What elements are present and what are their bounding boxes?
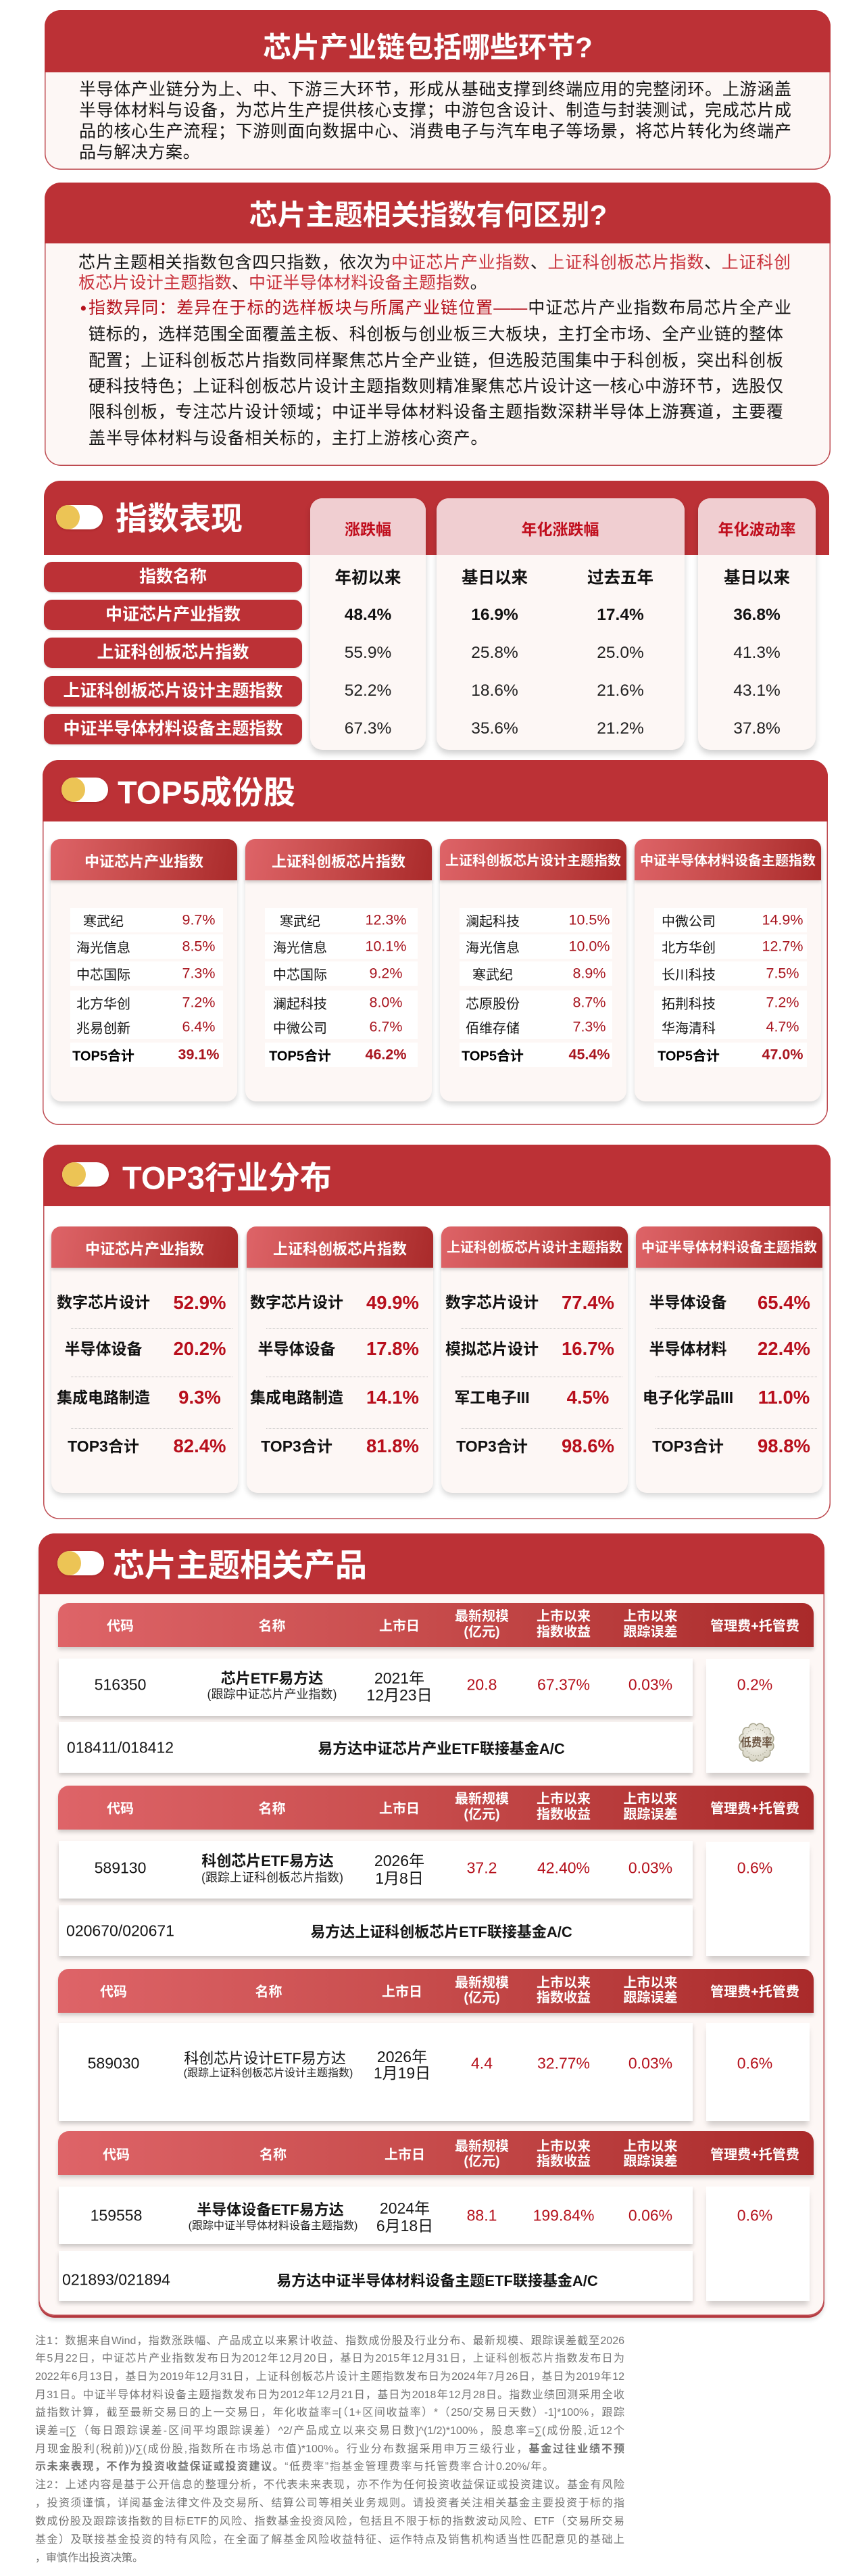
column: annualized change: 25.0% <box>597 644 644 662</box>
card: CSI semiconductor materials equipment top 5: 华海清科 <box>662 1021 716 1036</box>
card: CSI chip industry top 3: 集成电路制造 <box>57 1389 150 1406</box>
card: CSI semiconductor materials equipment top 5: 中证半导体材料设备主题指数 <box>640 853 816 868</box>
card: CSI chip industry top 5: 6.4% <box>182 1018 216 1034</box>
card: SSE STAR chip top 3: TOP3合计 <box>261 1437 332 1455</box>
card: SSE STAR chip design top 3: 数字芯片设计 <box>445 1293 539 1311</box>
card: SSE STAR chip design top 3: 模拟芯片设计 <box>445 1340 539 1358</box>
card: SSE STAR chip design top 5: 寒武纪 <box>472 968 513 983</box>
table header: 上市日 <box>379 1801 420 1816</box>
card: CSI semiconductor materials equipment top 5: 中微公司 <box>662 914 716 929</box>
footnotes <box>35 2335 624 2564</box>
column: change <box>310 498 426 750</box>
heading text: TOP5成份股 <box>118 775 295 810</box>
table header <box>58 1969 814 2013</box>
footnotes: 2022年6月13日，基日为2019年12月31日，上证科创板芯片设计主题指数发布日为2024年7月26日，基日为2019年12 <box>35 2371 624 2383</box>
card: CSI semiconductor materials equipment top 3: 11.0% <box>758 1387 810 1408</box>
card: SSE STAR chip design top 3: 77.4% <box>562 1292 614 1313</box>
table header: 上市以来 <box>623 2139 677 2154</box>
product block: 159558: (跟踪中证半导体材料设备主题指数) <box>189 2220 357 2232</box>
product block: 589130 <box>57 1786 815 1962</box>
table header: 代码 <box>107 1801 134 1816</box>
column: change: 52.2% <box>345 682 391 700</box>
icon: toggle <box>61 778 108 802</box>
product block: 589130: 易方达上证科创板芯片ETF联接基金A/C <box>310 1924 572 1940</box>
panel: related products <box>39 1533 824 2316</box>
card: CSI chip industry top 5: 7.2% <box>182 994 216 1010</box>
table header: 最新规模 <box>455 2139 509 2154</box>
footnotes: 月现金股利(税前))/∑(成份股,指数所在市场总市值)*100%。行业分布数据采用申万三级行业，基金过往业绩不预 <box>35 2443 624 2455</box>
heading band: products <box>39 1533 824 1594</box>
panel: index differences <box>45 183 831 466</box>
card: SSE STAR chip design top 5: 澜起科技 <box>466 914 520 929</box>
panel: top 3 industries <box>43 1145 831 1519</box>
card: SSE STAR chip top 5: 上证科创板芯片指数 <box>272 853 405 870</box>
product block: 159558 <box>57 2131 815 2307</box>
table header: 指数收益 <box>537 2154 591 2169</box>
table header: (亿元) <box>464 1990 500 2005</box>
column: annualized change: 25.8% <box>471 644 518 662</box>
column: annualized change: 35.6% <box>471 719 518 738</box>
card: CSI semiconductor materials equipment top 5: 47.0% <box>762 1047 803 1063</box>
row labels: index names: 上证科创板芯片设计主题指数 <box>63 682 282 700</box>
table header: 指数收益 <box>537 1807 591 1822</box>
product block: 589130: 589130 <box>95 1859 146 1877</box>
product block: 589030: 0.03% <box>628 2054 672 2072</box>
product block: 589030: 2026年 <box>377 2048 427 2066</box>
column: annualized change: 18.6% <box>471 682 518 700</box>
card: CSI chip industry top 5: TOP5合计 <box>72 1049 134 1064</box>
card: SSE STAR chip top 3 <box>247 1226 433 1493</box>
card: SSE STAR chip design top 5: 10.5% <box>569 911 610 928</box>
column: annualized volatility: 37.8% <box>733 719 781 738</box>
card: CSI semiconductor materials equipment top 5: TOP5合计 <box>658 1049 720 1064</box>
card: SSE STAR chip design top 5: 45.4% <box>569 1047 610 1063</box>
product block: 589030: 32.77% <box>537 2054 590 2072</box>
icon: low fee badge: 低费率 <box>741 1736 772 1749</box>
card: SSE STAR chip top 3: 14.1% <box>366 1387 419 1408</box>
footnotes: 注2：上述内容是基于公开信息的整理分析，不代表未来表现，亦不作为任何投资收益保证或投资建议。基金有风险 <box>35 2479 624 2491</box>
column: change: 48.4% <box>345 606 391 624</box>
text block: index list: 板芯片设计主题指数、中证半导体材料设备主题指数。 <box>78 273 487 292</box>
text block: industry chain description <box>79 80 791 162</box>
table header: 管理费+托管费 <box>710 2147 799 2162</box>
card: SSE STAR chip design top 5: 7.3% <box>572 1018 606 1034</box>
card: SSE STAR chip top 5 <box>245 839 432 1101</box>
product block: 589130: 1月8日 <box>375 1869 424 1887</box>
card: CSI chip industry top 5: 中证芯片产业指数 <box>84 853 203 870</box>
product block: 159558: 2024年 <box>380 2199 430 2217</box>
product block: 589030: 0.6% <box>737 2054 772 2072</box>
text block: index list: 芯片主题相关指数包含四只指数，依次为中证芯片产业指数、上证科创板芯片指数、上证科创 <box>78 253 791 272</box>
card: SSE STAR chip design top 3: TOP3合计 <box>456 1437 528 1455</box>
text block: index list <box>78 253 791 292</box>
footnotes: 益指数计算，截至最新交易日的上一交易日，年化收益率=[（1+区间收益率）*（250/交易日天数）-1]*100%，跟踪 <box>35 2407 624 2418</box>
card: CSI semiconductor materials equipment top 3: TOP3合计 <box>652 1437 724 1455</box>
heading: index differences <box>45 183 831 243</box>
card: CSI chip industry top 5: 8.5% <box>182 938 216 955</box>
product block: 589130: 2026年 <box>374 1852 424 1869</box>
panel: top 5 constituents <box>43 760 828 1125</box>
card: CSI semiconductor materials equipment top 3: 半导体设备 <box>649 1293 727 1311</box>
card: CSI chip industry top 5: 海光信息 <box>76 941 130 956</box>
column: annualized change: 过去五年 <box>587 569 653 587</box>
product block: 516350: 67.37% <box>537 1675 590 1693</box>
card: CSI semiconductor materials equipment top 3: 98.8% <box>758 1435 810 1456</box>
table header: 跟踪误差 <box>623 1807 677 1822</box>
card: SSE STAR chip design top 5: 8.7% <box>572 994 606 1010</box>
card: SSE STAR chip design top 3: 军工电子III <box>454 1389 530 1406</box>
product block: 159558: 199.84% <box>533 2207 594 2224</box>
product block: 516350: 2021年 <box>374 1669 424 1687</box>
card: SSE STAR chip design top 3 <box>441 1226 628 1493</box>
card: SSE STAR chip top 5: 12.3% <box>366 911 406 928</box>
table header: 名称 <box>258 1619 285 1633</box>
row labels: index names: 中证半导体材料设备主题指数 <box>63 719 282 738</box>
card: SSE STAR chip top 3: 数字芯片设计 <box>250 1293 343 1311</box>
product block: 516350: 芯片ETF易方达 <box>221 1670 323 1687</box>
footnotes: 误差=[∑（每日跟踪误差-区间平均跟踪误差）^2/产品成立以来交易日数]^(1/2)*100%，股息率=∑(成份股,近12个 <box>35 2425 624 2437</box>
footnotes: 年5月22日，中证芯片产业指数发布日为2012年12月20日，基日为2015年12月31日，上证科创板芯片指数发布日为 <box>35 2353 624 2364</box>
table header: 跟踪误差 <box>623 2154 677 2169</box>
text block: industry chain description: 半导体材料与设备，为芯片生产提供核心支撑；中游包含设计、制造与封装测试，完成芯片成 <box>79 101 791 120</box>
card: CSI semiconductor materials equipment top 5: 7.2% <box>766 994 799 1010</box>
product block: 159558: 021893/021894 <box>62 2270 170 2288</box>
column: annualized change: 21.2% <box>597 719 644 738</box>
icon: toggle <box>57 1551 104 1575</box>
column: annualized volatility: 41.3% <box>733 644 781 662</box>
table header: 名称 <box>255 1985 282 2000</box>
card: CSI semiconductor materials equipment top 5: 4.7% <box>766 1018 799 1034</box>
table header: 上市日 <box>385 2147 425 2162</box>
card: SSE STAR chip design top 3: 16.7% <box>562 1338 614 1359</box>
column: annualized volatility <box>698 498 816 750</box>
card: SSE STAR chip design top 5: 海光信息 <box>466 941 520 956</box>
text block: industry chain description: 品与解决方案。 <box>79 143 200 162</box>
product block: 589030: 1月19日 <box>374 2064 430 2082</box>
table header: 管理费+托管费 <box>710 1619 799 1633</box>
card: SSE STAR chip top 5: 10.1% <box>366 938 406 955</box>
card: CSI semiconductor materials equipment top 5: 长川科技 <box>662 968 716 983</box>
card: SSE STAR chip top 3: 81.8% <box>366 1435 419 1456</box>
footnotes: ，审慎作出投资决策。 <box>35 2552 143 2564</box>
table header: 最新规模 <box>455 1609 509 1624</box>
product block: 159558: 6月18日 <box>376 2217 433 2235</box>
column: change: 67.3% <box>345 719 391 738</box>
product block: 516350: 0.2% <box>737 1675 772 1693</box>
product block: 516350: 0.03% <box>628 1675 672 1693</box>
heading band: index performance <box>44 481 829 555</box>
product block: 589130: (跟踪上证科创板芯片指数) <box>201 1871 343 1884</box>
column: change: 55.9% <box>345 644 391 662</box>
text block: similarities and differences bullet: 配置；上证科创板芯片指数同样聚焦芯片全产业链，但选股范围集中于科创板，突出科创板 <box>89 351 783 370</box>
card: SSE STAR chip top 3: 集成电路制造 <box>250 1389 343 1406</box>
heading: index differences: 芯片主题相关指数有何区别? <box>249 199 607 231</box>
card: CSI semiconductor materials equipment top 3 <box>636 1226 822 1493</box>
icon: toggle <box>56 505 103 529</box>
table header: 最新规模 <box>455 1792 509 1807</box>
card: SSE STAR chip top 5: 澜起科技 <box>273 997 327 1011</box>
card: SSE STAR chip design top 3: 98.6% <box>562 1435 614 1456</box>
table header: 管理费+托管费 <box>710 1801 799 1816</box>
card: CSI chip industry top 3: 9.3% <box>178 1387 221 1408</box>
heading band: top 3 <box>43 1145 831 1206</box>
card: CSI semiconductor materials equipment top 3: 中证半导体材料设备主题指数 <box>641 1240 817 1255</box>
card: SSE STAR chip top 5: 海光信息 <box>273 941 327 956</box>
card: SSE STAR chip design top 5: 10.0% <box>569 938 610 955</box>
table header <box>58 2131 814 2175</box>
card: CSI semiconductor materials equipment top 5: 7.5% <box>766 965 799 982</box>
row labels: index names: 上证科创板芯片指数 <box>97 643 249 662</box>
table header: 上市以来 <box>537 1792 591 1807</box>
column: annualized change: 17.4% <box>597 606 644 624</box>
product block: 589130: 0.03% <box>628 1859 672 1877</box>
card: CSI chip industry top 3: 中证芯片产业指数 <box>85 1241 204 1258</box>
card: CSI semiconductor materials equipment top 3: 半导体材料 <box>649 1340 727 1358</box>
column: change: 年初以来 <box>335 569 401 587</box>
card: SSE STAR chip top 5: 中芯国际 <box>273 968 327 983</box>
column: annualized change: 21.6% <box>597 682 644 700</box>
column: annualized change: 年化涨跌幅 <box>522 521 599 538</box>
card: SSE STAR chip design top 5: TOP5合计 <box>462 1049 524 1064</box>
table header: 跟踪误差 <box>623 1990 677 2005</box>
card: SSE STAR chip top 5: 8.0% <box>369 994 403 1010</box>
card: SSE STAR chip top 5: 6.7% <box>369 1018 403 1034</box>
column: annualized volatility: 年化波动率 <box>718 521 796 538</box>
card: SSE STAR chip design top 3: 4.5% <box>567 1387 609 1408</box>
card: CSI semiconductor materials equipment top 5: 12.7% <box>762 938 803 955</box>
footnotes: 月31日。中证半导体材料设备主题指数发布日为2012年12月21日，基日为2018年12月28日。指数业绩回测采用全收 <box>35 2389 624 2401</box>
text block: industry chain description: 半导体产业链分为上、中、下游三大环节，形成从基础支撑到终端应用的完整闭环。上游涵盖 <box>79 80 791 99</box>
product block: 516350: 易方达中证芯片产业ETF联接基金A/C <box>318 1740 565 1757</box>
product block: 589130: 42.40% <box>537 1859 590 1877</box>
product block: 589030: 4.4 <box>471 2054 493 2072</box>
table header: 代码 <box>103 2147 130 2162</box>
table header: 指数收益 <box>537 1990 591 2005</box>
table header: 上市以来 <box>623 1609 677 1624</box>
card: CSI semiconductor materials equipment top 5: 拓荆科技 <box>662 997 716 1011</box>
column: annualized change: 基日以来 <box>462 569 528 587</box>
card: CSI chip industry top 5: 9.7% <box>182 911 216 928</box>
table header: 上市以来 <box>537 1976 591 1990</box>
heading text: TOP3行业分布 <box>122 1160 332 1195</box>
table header: 名称 <box>260 2147 287 2162</box>
icon: toggle <box>62 1162 109 1187</box>
table header: 管理费+托管费 <box>710 1985 799 2000</box>
column: change: 涨跌幅 <box>345 521 391 538</box>
card: SSE STAR chip top 3: 上证科创板芯片指数 <box>273 1241 407 1258</box>
card: CSI chip industry top 5: 7.3% <box>182 965 216 982</box>
card: SSE STAR chip top 3: 半导体设备 <box>258 1340 335 1358</box>
heading: industry chain: 芯片产业链包括哪些环节? <box>263 31 593 64</box>
footnotes: 数成份股及跟踪该指数的目标ETF的风险、指数基金投资风险，包括且不限于标的指数波动风险、ETF（交易所交易 <box>35 2516 624 2527</box>
card: CSI semiconductor materials equipment top 3: 电子化学品III <box>643 1389 733 1406</box>
column: annualized change: 16.9% <box>471 606 518 624</box>
card: SSE STAR chip top 3: 17.8% <box>366 1338 419 1359</box>
table header: 代码 <box>100 1985 127 2000</box>
table header: (亿元) <box>464 1807 500 1822</box>
card: CSI semiconductor materials equipment top 3: 22.4% <box>758 1338 810 1359</box>
panel: index performance <box>43 481 829 757</box>
card: SSE STAR chip design top 5: 芯原股份 <box>466 997 520 1011</box>
product block: 159558: 0.06% <box>628 2207 672 2224</box>
card: CSI chip industry top 5: 北方华创 <box>76 997 130 1011</box>
card: CSI chip industry top 5 <box>51 839 237 1101</box>
footnotes: ，投资须谨慎，详阅基金法律文件及交易所、结算公司等相关业务规则。请投资者关注相关基金主要投资于标的指 <box>35 2498 624 2509</box>
text block: similarities and differences bullet: • <box>80 299 86 318</box>
text block: similarities and differences bullet: 链标的，选样范围全面覆盖主板、科创板与创业板三大板块，主打全市场、全产业链的整体 <box>89 325 783 343</box>
table header: 跟踪误差 <box>623 1625 677 1640</box>
footnotes: 示未来表现，不作为投资收益保证或投资建议。“低费率”指基金管理费率与托管费率合计0.20%/年。 <box>35 2461 553 2473</box>
table header <box>58 1786 814 1830</box>
footnotes: 注1：数据来自Wind，指数涨跌幅、产品成立以来累计收益、指数成份股及行业分布、最新规模、跟踪误差截至2026 <box>35 2335 624 2347</box>
column: annualized volatility: 36.8% <box>733 606 781 624</box>
product block: 159558: 88.1 <box>467 2207 497 2224</box>
row labels: index names: 指数名称 <box>139 567 207 586</box>
card: CSI semiconductor materials equipment top 5: 北方华创 <box>662 941 716 956</box>
card: SSE STAR chip design top 5: 上证科创板芯片设计主题指数 <box>445 853 621 868</box>
product block: 589130: 科创芯片ETF易方达 <box>201 1853 334 1869</box>
table header: (亿元) <box>464 1625 500 1640</box>
table header <box>58 1603 814 1647</box>
table header: 上市以来 <box>537 1609 591 1624</box>
product block: 589130: 0.6% <box>737 1859 772 1877</box>
product block: 159558: 159558 <box>91 2207 142 2224</box>
table header: 名称 <box>258 1801 285 1816</box>
product block: 516350: 018411/018412 <box>67 1739 174 1757</box>
product block: 589030: 科创芯片设计ETF易方达 <box>184 2050 346 2067</box>
product block: 589030: 589030 <box>88 2054 139 2072</box>
heading band: top 5 <box>43 760 828 821</box>
card: SSE STAR chip top 3: 49.9% <box>366 1292 419 1313</box>
card: SSE STAR chip top 5: 46.2% <box>366 1047 406 1063</box>
card: SSE STAR chip top 5: TOP5合计 <box>269 1049 331 1064</box>
row labels: index names: 中证芯片产业指数 <box>105 605 241 624</box>
product block: 516350 <box>57 1603 815 1780</box>
card: CSI chip industry top 3: 数字芯片设计 <box>57 1293 150 1311</box>
product block: 159558: 0.6% <box>737 2207 772 2224</box>
table header: (亿元) <box>464 2154 500 2169</box>
product block: 516350: 12月23日 <box>366 1686 432 1704</box>
product block: 516350: (跟踪中证芯片产业指数) <box>207 1688 337 1701</box>
card: SSE STAR chip design top 5 <box>440 839 626 1101</box>
column: annualized volatility: 基日以来 <box>724 569 790 587</box>
column: annualized change <box>437 498 685 750</box>
product block: 159558: 半导体设备ETF易方达 <box>197 2201 344 2218</box>
product block: 589030 <box>57 1969 815 2127</box>
card: CSI chip industry top 3: 82.4% <box>174 1435 226 1456</box>
card: SSE STAR chip top 5: 中微公司 <box>273 1021 327 1036</box>
text block: similarities and differences bullet: 限科创板，专注芯片设计领域；中证半导体材料设备主题指数深耕半导体上游赛道，主要覆 <box>89 403 783 422</box>
card: CSI chip industry top 3: 半导体设备 <box>65 1340 142 1358</box>
row labels: index names <box>43 562 303 746</box>
product block: 516350: 20.8 <box>467 1675 497 1693</box>
card: CSI chip industry top 5: 中芯国际 <box>76 968 130 983</box>
text block: similarities and differences bullet: 盖半导体材料与设备相关标的，主打上游核心资产。 <box>89 429 488 448</box>
column: annualized volatility: 43.1% <box>733 682 781 700</box>
table header: 最新规模 <box>455 1976 509 1990</box>
card: SSE STAR chip design top 5: 佰维存储 <box>466 1021 520 1036</box>
product block: 516350: 516350 <box>95 1675 146 1693</box>
card: CSI chip industry top 3: 20.2% <box>174 1338 226 1359</box>
table header: 上市日 <box>382 1985 422 2000</box>
table header: 指数收益 <box>537 1625 591 1640</box>
panel: industry chain <box>45 10 831 170</box>
text block: industry chain description: 品的核心生产流程；下游则面向数据中心、消费电子与汽车电子等场景，将芯片转化为终端产 <box>79 122 791 141</box>
card: SSE STAR chip top 5: 9.2% <box>369 965 403 982</box>
card: CSI chip industry top 3: TOP3合计 <box>68 1437 139 1455</box>
card: SSE STAR chip top 5: 寒武纪 <box>280 914 320 929</box>
heading text: 指数表现 <box>116 500 243 537</box>
footnotes: 基金）及联接基金投资的特有风险，在全面了解基金风险收益特征、运作特点及销售机构适当性匹配意见的基础上 <box>35 2534 624 2546</box>
text block: similarities and differences bullet: 硬科技特色；上证科创板芯片设计主题指数则精准聚焦芯片设计这一核心中游环节，选股仅 <box>89 377 783 396</box>
product block: 589030: (跟踪上证科创板芯片设计主题指数) <box>184 2068 353 2079</box>
table header: 上市日 <box>379 1619 420 1633</box>
card: SSE STAR chip design top 5: 8.9% <box>572 965 606 982</box>
card: CSI chip industry top 5: 兆易创新 <box>76 1021 130 1036</box>
card: SSE STAR chip design top 3: 上证科创板芯片设计主题指数 <box>447 1240 622 1255</box>
product block: 159558: 易方达中证半导体材料设备主题ETF联接基金A/C <box>276 2272 598 2289</box>
icon: low fee badge <box>739 1723 774 1762</box>
card: CSI chip industry top 5: 寒武纪 <box>83 914 124 929</box>
text block: similarities and differences bullet: 指数异同：差异在于标的选样板块与所属产业链位置——中证芯片产业指数布局芯片全产业 <box>89 299 791 318</box>
table header: 代码 <box>107 1619 134 1633</box>
heading text: 芯片主题相关产品 <box>113 1547 367 1583</box>
card: CSI semiconductor materials equipment top 5: 14.9% <box>762 911 803 928</box>
product block: 589130: 020670/020671 <box>66 1922 174 1939</box>
table header: 上市以来 <box>623 1792 677 1807</box>
table header: 上市以来 <box>623 1976 677 1990</box>
card: CSI semiconductor materials equipment top 5 <box>635 839 821 1101</box>
text block: similarities and differences bullet <box>80 299 791 448</box>
card: CSI chip industry top 3: 52.9% <box>174 1292 226 1313</box>
card: CSI chip industry top 5: 39.1% <box>178 1047 219 1063</box>
heading: industry chain <box>45 10 831 72</box>
card: CSI chip industry top 3 <box>51 1226 238 1493</box>
product block: 589130: 37.2 <box>467 1859 497 1877</box>
table header: 上市以来 <box>537 2139 591 2154</box>
card: CSI semiconductor materials equipment top 3: 65.4% <box>758 1292 810 1313</box>
